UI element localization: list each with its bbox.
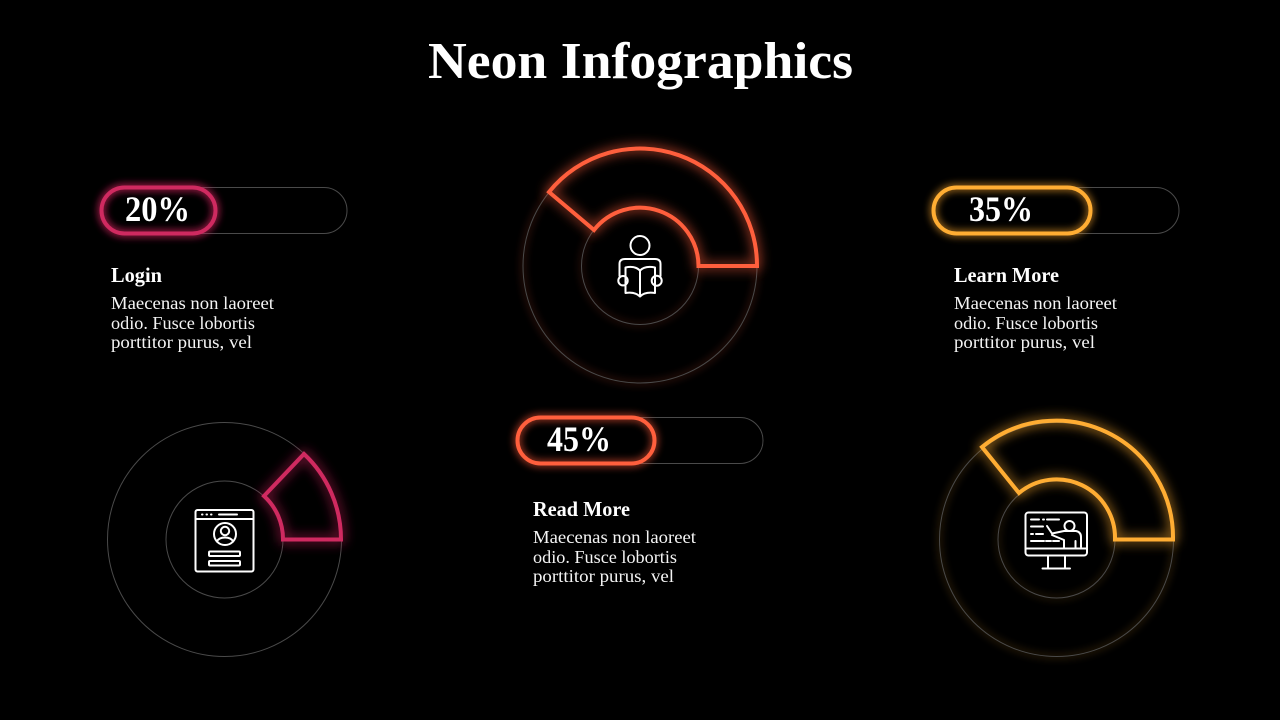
donut chart: read more: [523, 149, 757, 383]
text: learn more: [954, 263, 1117, 352]
text: login: Login: [111, 263, 162, 287]
progress track: read more: [517, 418, 763, 464]
icon: browser profile: [196, 510, 254, 572]
text: learn more: odio. Fusce lobortis: [954, 313, 1098, 333]
progress pill: 20%: 20%: [125, 189, 190, 229]
progress pill: 35%: 35%: [969, 189, 1033, 229]
donut chart: login: [108, 422, 342, 656]
text: read more: porttitor purus, vel: [533, 566, 674, 586]
panel: read more progress: [517, 418, 763, 586]
text: read more: odio. Fusce lobortis: [533, 547, 677, 567]
text: login: Maecenas non laoreet: [111, 293, 274, 313]
title: Neon Infographics: [428, 33, 853, 90]
panel: learn more progress: [933, 188, 1179, 352]
text: read more: Read More: [533, 497, 630, 521]
text: learn more: Learn More: [954, 263, 1059, 287]
progress track: login: [101, 188, 347, 234]
text: login: odio. Fusce lobortis: [111, 313, 255, 333]
progress pill: 45%: [518, 418, 654, 464]
text: read more: [533, 497, 696, 586]
icon: online teacher monitor: [1026, 512, 1087, 568]
text: learn more: porttitor purus, vel: [954, 332, 1095, 352]
text: learn more: Maecenas non laoreet: [954, 293, 1117, 313]
icon: person reading book: [618, 236, 662, 296]
text: read more: Maecenas non laoreet: [533, 527, 696, 547]
text: login: [111, 263, 274, 352]
panel: login progress: [101, 188, 347, 352]
progress pill: 35%: [934, 188, 1090, 234]
progress track: learn more: [933, 188, 1179, 234]
progress pill: 45%: 45%: [547, 419, 611, 459]
progress pill: 20%: [102, 188, 216, 234]
text: login: porttitor purus, vel: [111, 332, 252, 352]
donut chart: learn more: [940, 421, 1174, 656]
